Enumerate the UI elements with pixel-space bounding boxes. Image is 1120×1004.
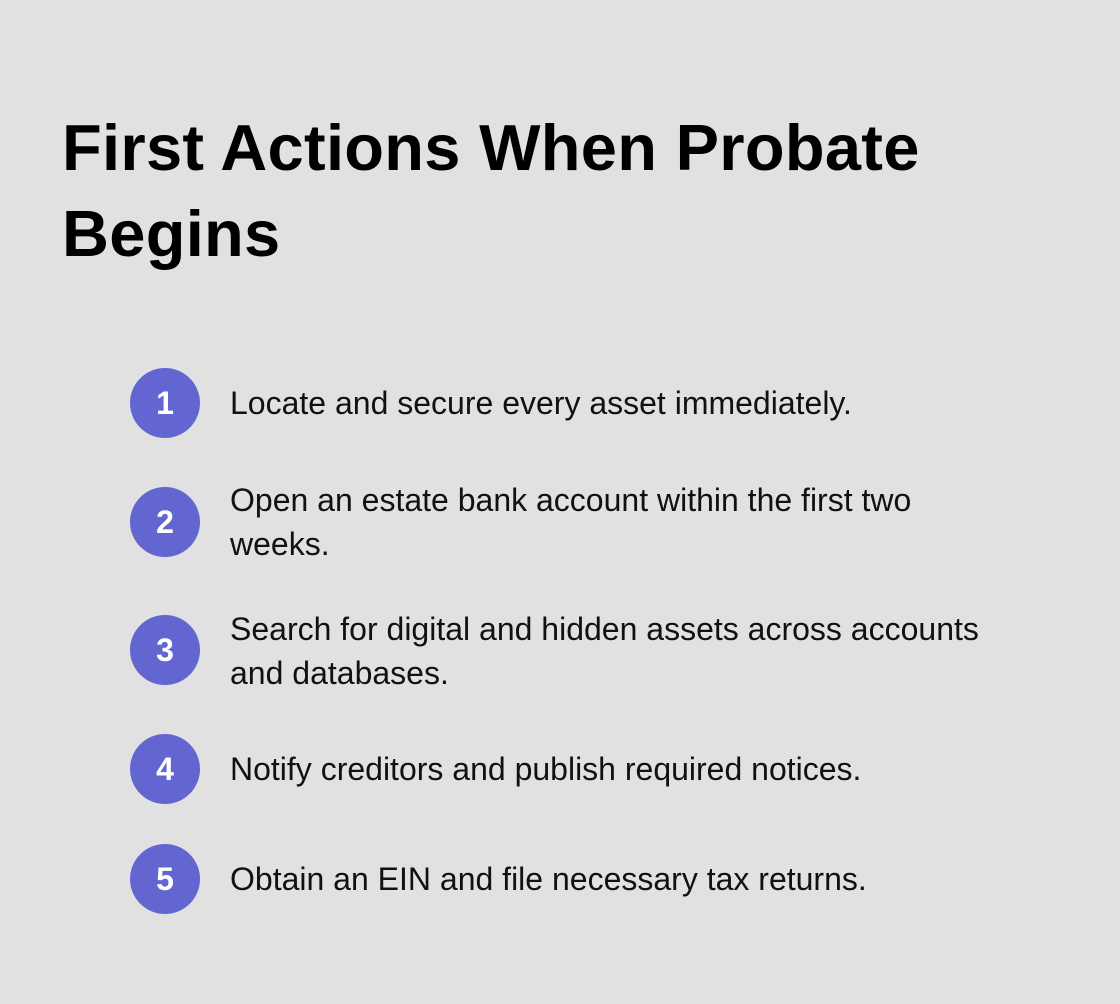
step 5: 5 (156, 861, 174, 897)
step 4: 4 (156, 751, 174, 787)
step 1: Locate and secure every asset immediately. (230, 385, 852, 421)
step 2: 2 (156, 504, 174, 540)
step 3: 3 (156, 632, 174, 668)
step 2: Open an estate bank account within the first two weeks. (230, 482, 911, 562)
step 4: Notify creditors and publish required notices. (230, 751, 861, 787)
step 4 (130, 734, 861, 804)
title: First Actions When Probate Begins (62, 111, 920, 270)
step 1: 1 (156, 385, 174, 421)
step 3: Search for digital and hidden assets across accounts and databases. (230, 611, 979, 691)
step 1 (130, 368, 852, 438)
step 5 (130, 844, 867, 914)
step 5: Obtain an EIN and file necessary tax returns. (230, 861, 867, 897)
